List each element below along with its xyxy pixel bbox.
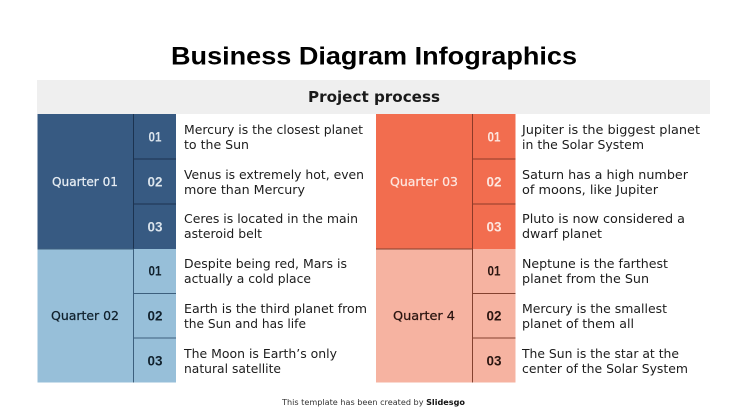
- text: quarter 03 items: in the Solar System: [522, 138, 644, 152]
- text: quarter 03 items: Pluto is now considered a: [522, 212, 685, 226]
- panel: quarter 02: Quarter 02: [51, 309, 119, 323]
- text: quarter 02 items: The Moon is Earth’s only: [183, 347, 337, 361]
- panel: quarter 01: 03: [148, 220, 163, 234]
- panel: quarter 02: 01: [148, 264, 162, 278]
- text: quarter 01 items: more than Mercury: [184, 183, 305, 197]
- text: quarter 01 items: asteroid belt: [184, 227, 262, 241]
- panel: quarter 02: 03: [148, 354, 163, 368]
- panel: quarter 01: 02: [148, 174, 162, 190]
- text: quarter 01 items: Mercury is the closest planet: [184, 123, 363, 137]
- text: quarter 01 items: Venus is extremely hot, even: [184, 168, 364, 182]
- panel: quarter 03: 01: [488, 130, 501, 144]
- text: quarter 02 items: Earth is the third planet from: [184, 302, 367, 316]
- text: quarter 03 items: of moons, like Jupiter: [522, 183, 658, 197]
- text: quarter 03 items: dwarf planet: [522, 227, 602, 241]
- text: quarter 03 items: [521, 123, 700, 241]
- text: quarter 4 items: center of the Solar System: [522, 362, 688, 376]
- panel: quarter 4: 03: [486, 354, 502, 368]
- text: quarter 4 items: Mercury is the smallest: [522, 302, 667, 316]
- panel: quarter 4: Quarter 4: [393, 309, 455, 323]
- text: quarter 02 items: actually a cold place: [184, 272, 311, 286]
- text: quarter 02 items: [183, 257, 367, 376]
- panel: quarter 01: [38, 114, 176, 249]
- title: Business Diagram Infographics: [171, 42, 577, 70]
- footer credit: This template has been created by Slidesgo: [281, 398, 465, 407]
- text: quarter 4 items: planet from the Sun: [522, 272, 649, 286]
- text: quarter 03 items: Jupiter is the biggest planet: [521, 123, 700, 137]
- text: quarter 4 items: Neptune is the farthest: [522, 257, 668, 271]
- text: quarter 03 items: Saturn has a high number: [522, 168, 688, 182]
- panel: quarter 4: 01: [488, 264, 501, 278]
- text: quarter 4 items: [521, 257, 688, 376]
- panel: quarter 01: Quarter 01: [52, 175, 118, 189]
- panel: quarter 03: [376, 114, 516, 249]
- header band: project process: [37, 80, 710, 114]
- text: quarter 01 items: Ceres is located in the main: [184, 212, 358, 226]
- panel: quarter 02: 02: [148, 308, 162, 324]
- header band: project process: Project process: [308, 88, 440, 106]
- text: quarter 02 items: the Sun and has life: [184, 317, 306, 331]
- text: quarter 4 items: planet of them all: [522, 317, 634, 331]
- panel: quarter 03: 03: [486, 220, 502, 234]
- text: quarter 01 items: to the Sun: [184, 138, 249, 152]
- text: quarter 02 items: Despite being red, Mars is: [184, 257, 347, 271]
- panel: quarter 03: 02: [486, 174, 502, 190]
- panel: quarter 4: 02: [486, 308, 502, 324]
- panel: quarter 03: Quarter 03: [390, 175, 458, 189]
- panel: quarter 4: [376, 249, 516, 382]
- panel: quarter 02: [38, 249, 176, 382]
- text: quarter 4 items: The Sun is the star at the: [521, 347, 679, 361]
- panel: quarter 01: 01: [148, 130, 162, 144]
- text: quarter 01 items: [184, 123, 364, 241]
- text: quarter 02 items: natural satellite: [184, 362, 281, 376]
